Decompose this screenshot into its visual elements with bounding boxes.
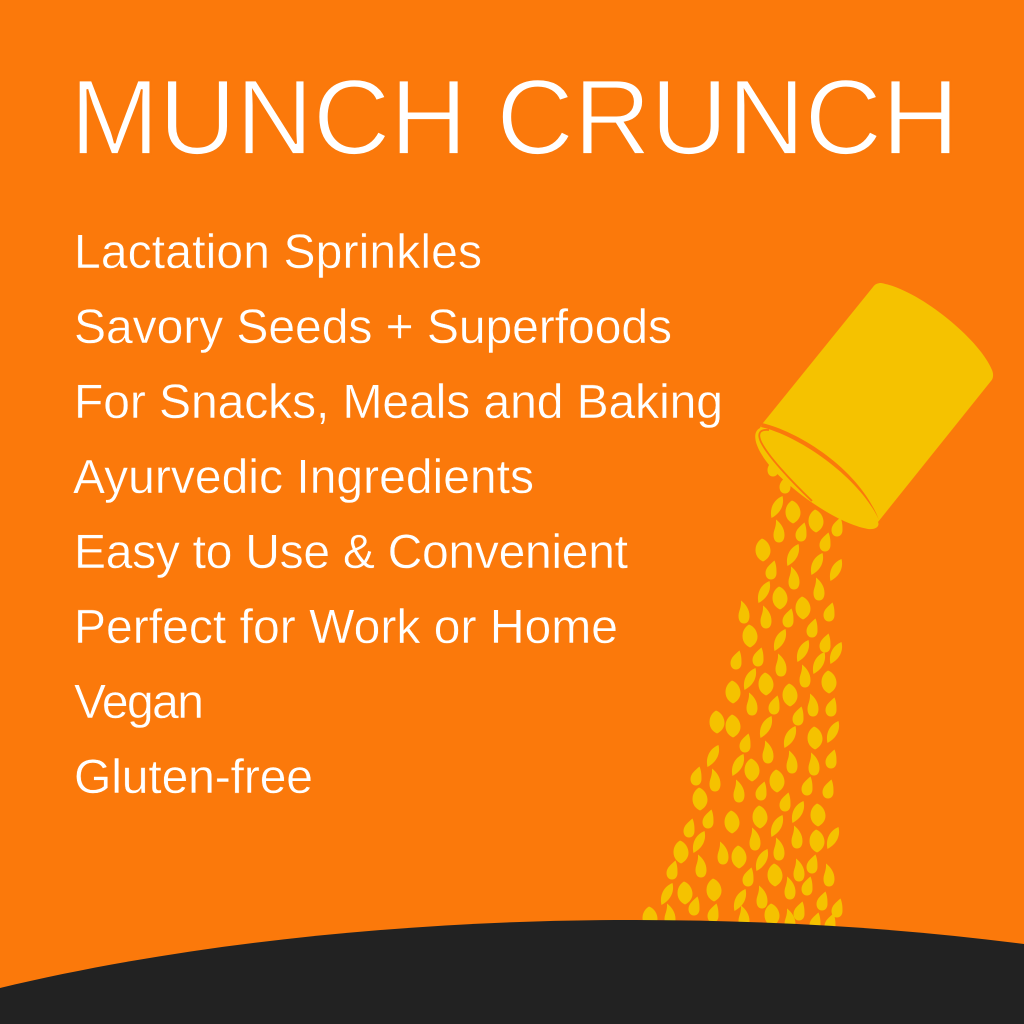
list item: work or home: Perfect for Work or Home [74, 601, 618, 654]
list item: savory seeds: Savory Seeds + Superfoods [74, 301, 672, 354]
list item: gluten-free: Gluten-free [74, 751, 313, 804]
list item: easy to use: Easy to Use & Convenient [74, 526, 628, 579]
title: MUNCH CRUNCH [70, 57, 959, 177]
list item: ayurvedic ingredients: Ayurvedic Ingredients [73, 451, 534, 504]
list item: lactation sprinkles: Lactation Sprinkles [74, 226, 482, 279]
dark ground curve [0, 920, 1024, 1024]
icon: tipped yellow shaker [755, 283, 993, 529]
list item: snacks, meals, baking: For Snacks, Meals and Baking [74, 376, 723, 429]
feature list [73, 226, 723, 804]
falling seeds [642, 458, 842, 932]
list item: vegan: Vegan [74, 676, 204, 729]
